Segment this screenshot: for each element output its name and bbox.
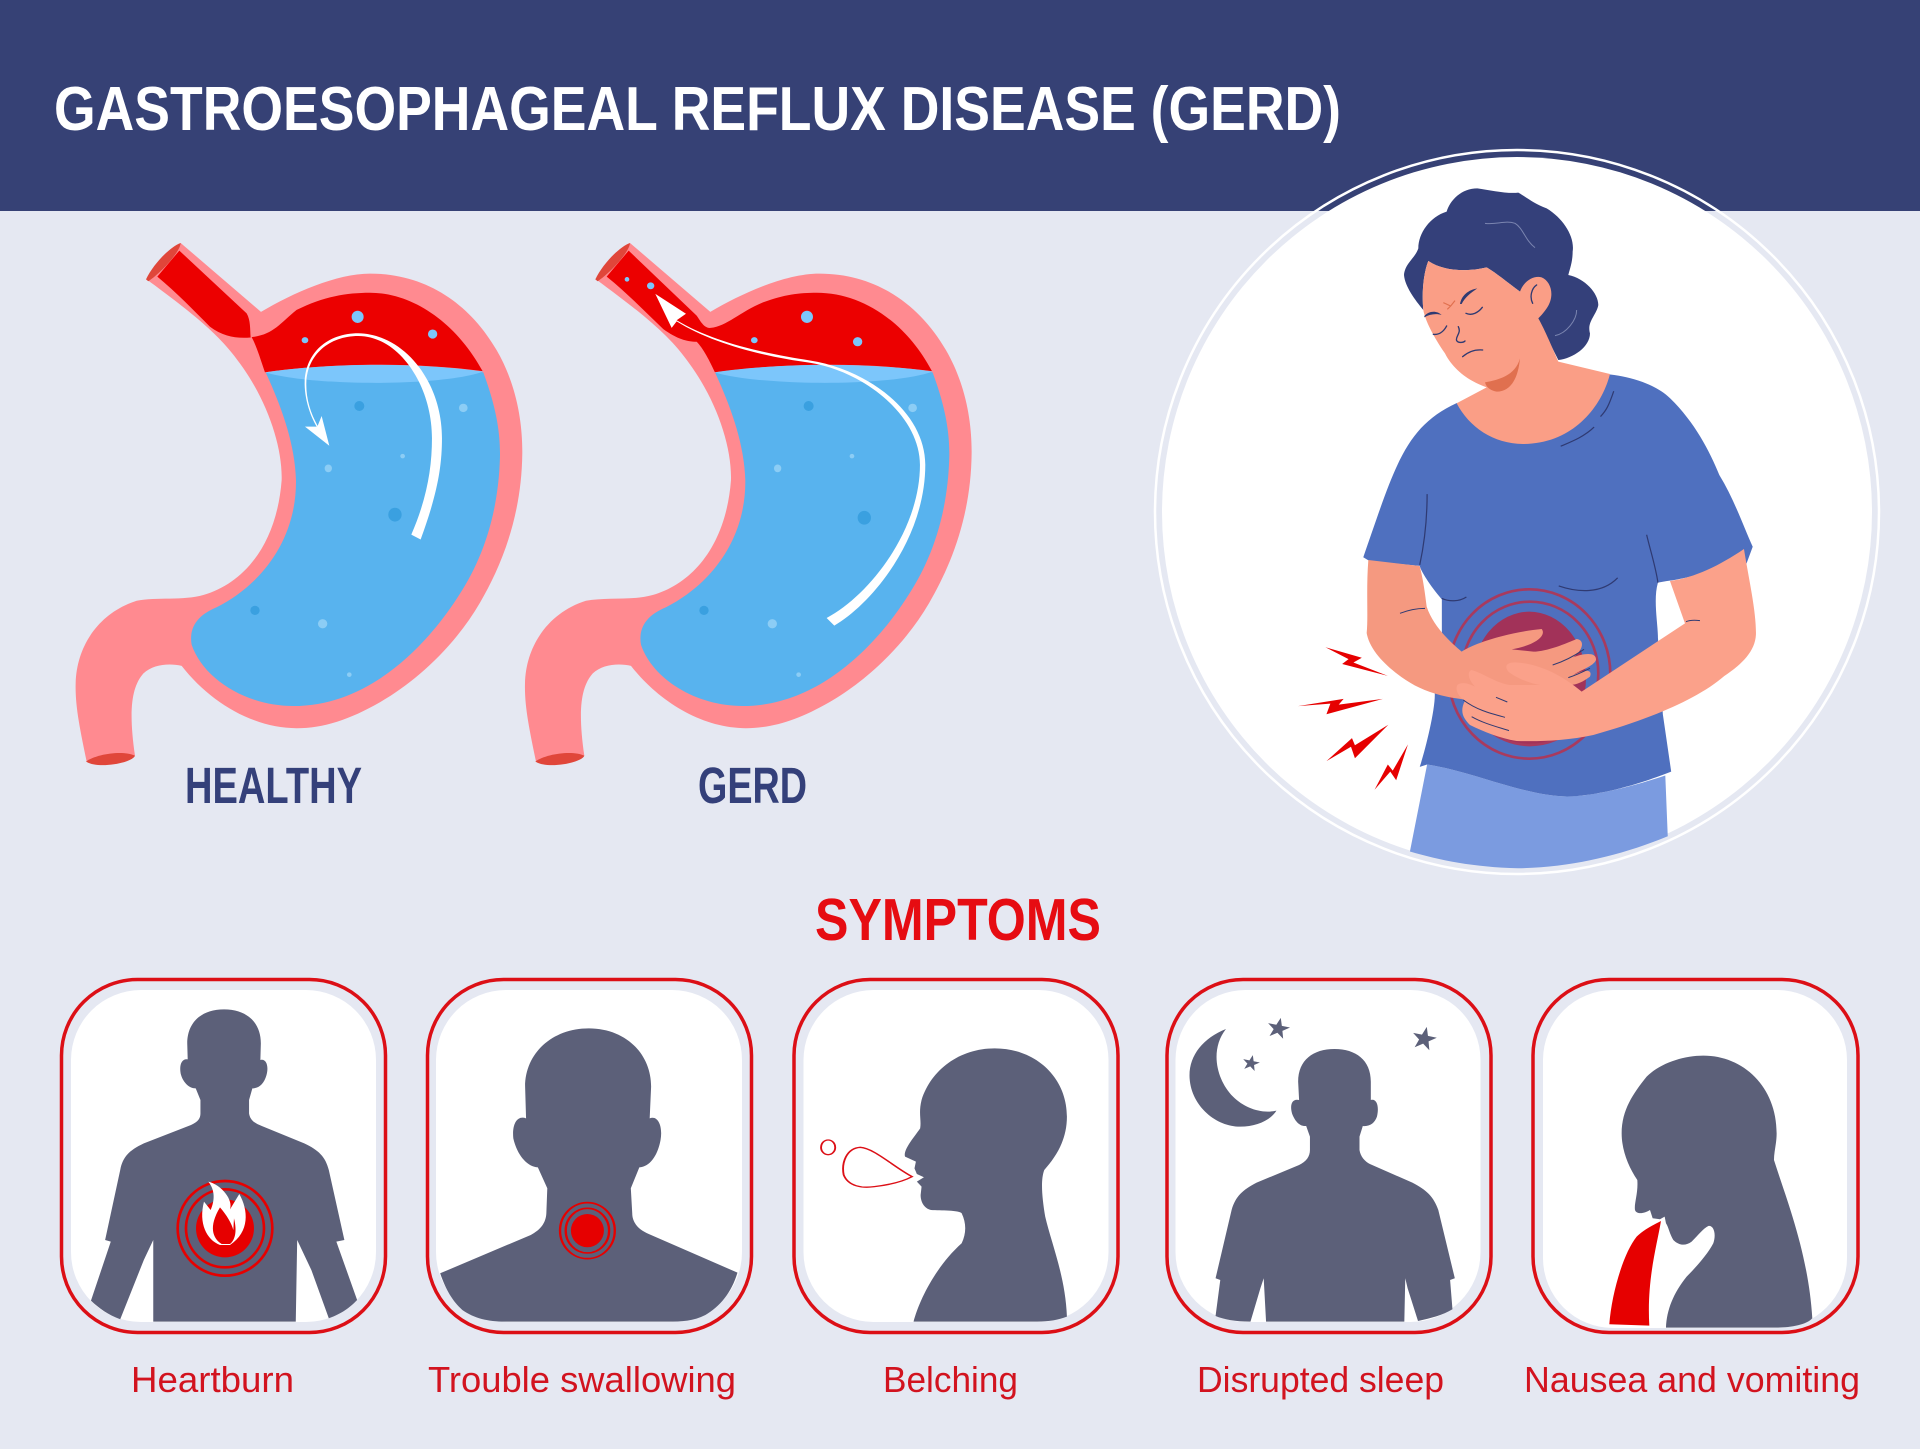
hair (1404, 188, 1598, 360)
panel: nausea and vomiting (1533, 980, 1858, 1332)
icon: person (91, 1009, 357, 1322)
eyes, nose, mouth (1433, 285, 1537, 357)
back arm (1367, 560, 1596, 710)
panel: disrupted sleep (1167, 980, 1491, 1332)
head (1404, 188, 1610, 444)
panel: trouble swallowing (428, 980, 752, 1332)
arrow: food moving down (305, 333, 442, 540)
shirt (1363, 374, 1753, 797)
arms and hands (1367, 549, 1756, 741)
label: belching: Belching (883, 1359, 1018, 1400)
arrow: acid reflux moving up (655, 294, 925, 626)
icon: person belching (821, 1048, 1067, 1322)
header band (0, 0, 1920, 211)
pain rings (1448, 589, 1610, 759)
label: trouble swallowing: Trouble swallowing (428, 1359, 736, 1400)
shirt folds (1420, 391, 1658, 601)
panel: belching (794, 980, 1118, 1332)
finger and arm lines (1400, 608, 1700, 731)
front arm (1457, 549, 1756, 741)
GERD stomach diagram (525, 243, 972, 765)
neck shadow (1485, 358, 1520, 392)
label: GERD: GERD (698, 757, 807, 814)
icon: flame with rings (178, 1181, 272, 1276)
woman with stomach pain (1298, 188, 1756, 868)
icon: person with moon and stars (1190, 1016, 1455, 1322)
label: disrupted sleep: Disrupted sleep (1197, 1359, 1444, 1400)
pain bolts (1298, 647, 1408, 790)
pants (1410, 764, 1668, 868)
panel: heartburn (62, 980, 386, 1332)
healthy stomach diagram (76, 243, 522, 765)
label: nausea and vomiting: Nausea and vomiting (1524, 1359, 1860, 1400)
label: healthy: HEALTHY (185, 757, 362, 814)
torso and clothes (1363, 374, 1753, 868)
frown (1443, 301, 1455, 309)
face and neck (1423, 261, 1610, 444)
title: GASTROESOPHAGEAL REFLUX DISEASE (GERD) (54, 75, 1341, 144)
label: heartburn: Heartburn (131, 1359, 294, 1400)
icon: person with throat pain (440, 1028, 737, 1322)
icon: person vomiting (1609, 1056, 1812, 1328)
eyebrows (1424, 288, 1477, 317)
circle backdrop (1155, 150, 1879, 874)
heading: symptoms: SYMPTOMS (815, 887, 1101, 953)
